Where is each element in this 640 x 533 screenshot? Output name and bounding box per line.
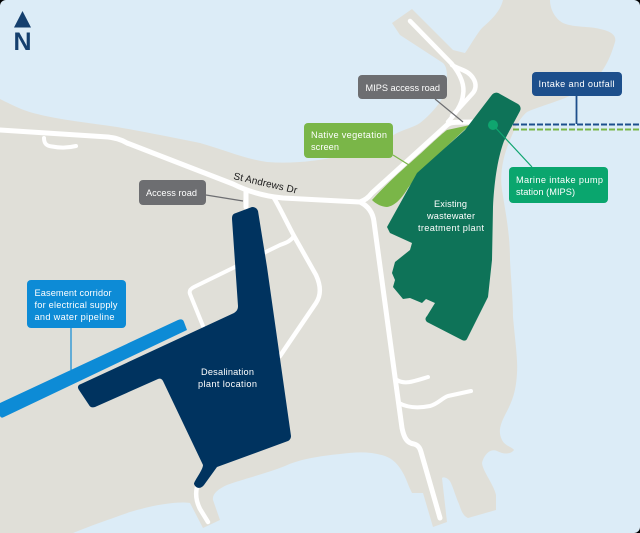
southern coast road	[196, 487, 208, 522]
leader: access road	[206, 195, 243, 201]
existing wastewater treatment plant area	[387, 93, 521, 341]
road label: St Andrews Dr	[232, 171, 299, 197]
label: existing wastewater treatment plant: Existing	[434, 199, 467, 209]
label: existing wastewater treatment plant: treatment plant	[418, 223, 484, 233]
callout: native vegetation screen	[304, 123, 393, 158]
south branch lower	[399, 391, 471, 407]
callout: intake and outfall	[532, 72, 622, 96]
callout: MIPS access road	[358, 75, 447, 99]
desalination plant location area	[78, 207, 291, 488]
callout: access road	[139, 180, 206, 205]
callout: native vegetation screen: Native vegetation	[311, 130, 387, 140]
roads	[0, 21, 477, 522]
eastern site road	[274, 198, 320, 356]
MIPS loop road	[452, 65, 476, 116]
callout: intake and outfall: Intake and outfall	[538, 79, 614, 89]
south road	[360, 202, 440, 518]
leader: intake	[576, 95, 578, 124]
leader: vegetation	[393, 155, 409, 165]
callout: marine intake pump station	[509, 167, 608, 203]
MIPS location marker	[488, 120, 498, 130]
callout: marine intake pump station: station (MIPS)	[516, 187, 575, 197]
access road stub	[244, 190, 248, 207]
callout: marine intake pump station: Marine intake pump	[516, 175, 603, 185]
label: desalination plant location: plant location	[198, 379, 257, 389]
callout: access road: Access road	[146, 188, 197, 198]
outfall dashed lines	[513, 124, 640, 130]
callout: easement corridor: Easement corridor	[34, 288, 112, 298]
callout: easement corridor: for electrical supply	[34, 300, 118, 310]
leader lines	[71, 95, 576, 370]
easement corridor band	[0, 319, 187, 418]
north arrow	[13, 11, 32, 56]
native vegetation screen area	[372, 125, 470, 207]
callout: easement corridor: and water pipeline	[34, 312, 114, 322]
main road: St Andrews Dr	[0, 122, 477, 202]
label: existing wastewater treatment plant	[418, 199, 484, 233]
label: existing wastewater treatment plant: wastewater	[426, 211, 475, 221]
minor road spur north-west	[44, 138, 76, 148]
outfall line	[513, 128, 640, 130]
south branch upper	[397, 377, 428, 382]
callout: MIPS access road: MIPS access road	[366, 83, 440, 93]
label: desalination plant location	[198, 367, 257, 389]
arrow head	[14, 11, 31, 28]
north letter: N	[13, 28, 32, 56]
leader: MIPS access road	[435, 99, 463, 122]
label: desalination plant location: Desalination	[201, 367, 254, 377]
callout: native vegetation screen: screen	[311, 142, 339, 152]
leader: easement	[70, 328, 72, 370]
callout: easement corridor	[27, 280, 126, 328]
MIPS access road	[410, 21, 463, 122]
intake line	[513, 124, 640, 126]
leader: MIPS	[493, 125, 532, 167]
western site road	[190, 236, 294, 326]
